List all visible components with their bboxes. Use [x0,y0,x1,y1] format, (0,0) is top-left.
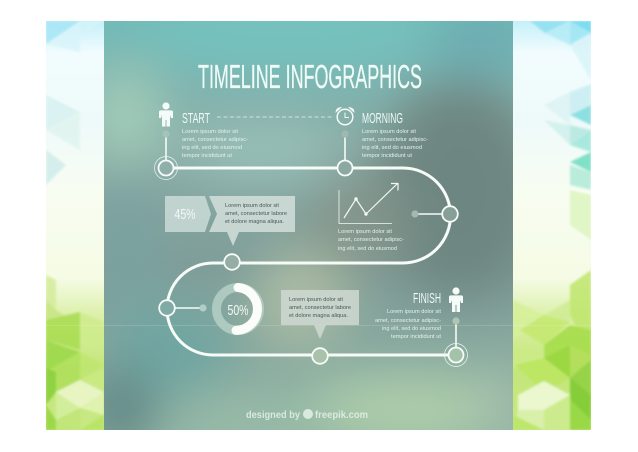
title: TIMELINE INFOGRAPHICS [198,58,422,95]
step: finish [375,287,468,366]
text: finish description [375,309,442,340]
step: morning [336,108,428,176]
text: morning description: amet, consectetur adipisc- [362,137,428,143]
heading: start: START [182,110,210,127]
text: morning description: ing elit, sed do eiusmod [362,145,422,151]
panel: blurred teal background [104,21,513,430]
icon: child figure [159,102,173,126]
node: morning [338,130,352,176]
text: callout: et dolore magna aliqua. [225,219,284,225]
credit: designed by [246,409,300,421]
line chart [339,184,398,224]
callout box [209,196,295,246]
chevron label [165,196,211,232]
text: start description: Lorem ipsum dolor sit [182,129,239,135]
panel: left mosaic band [46,21,104,430]
text: chart description [338,229,404,252]
text: chart description: amet, consectetur adipisc- [338,237,404,243]
timeline path [166,168,457,355]
text: start description [182,129,248,159]
text: start description: amet, consectetur adipisc- [182,137,248,143]
text: callout: Lorem ipsum dolor sit [225,203,280,209]
icon: child figure [449,287,463,312]
text: morning description: tempor incididunt ut [362,153,413,159]
callout: lower: et dolore magna aliqua. [289,313,348,319]
text: finish description: tempor incididunt ut [391,334,442,340]
node: finish [444,317,468,366]
text: callout [225,203,287,225]
node: right branch [411,206,458,222]
text: chart description: ing elit, sed do eiusmod [338,246,397,252]
text: finish description: ing elit, sed do eiusmod [382,326,441,332]
text: chart description: Lorem ipsum dolor sit [338,229,393,235]
callout: lower [281,290,359,339]
text: morning description [362,129,428,159]
text: morning description: Lorem ipsum dolor sit [362,129,417,135]
callout: 45 percent [165,196,295,246]
value: 45%: 45% [174,206,196,223]
heading: finish: FINISH [413,290,441,307]
callout: lower: amet, consectetur labore [289,305,351,311]
credit: freepik.com [315,409,368,421]
credit [246,409,368,421]
donut chart 50% [216,288,260,330]
text: start description: ing elit, sed do eiusmod [182,145,242,151]
donut chart 50%: 50% [228,302,248,319]
node: upper return [224,254,240,270]
callout: lower: Lorem ipsum dolor sit [289,297,344,303]
text: finish description: Lorem ipsum dolor sit [387,309,442,315]
panel: right mosaic band [513,21,591,430]
node: left branch [159,300,207,316]
heading: morning: MORNING [362,110,403,127]
node: lower [312,348,328,364]
text: finish description: amet, consectetur adipisc- [375,318,441,324]
step: start [154,102,248,180]
icon: alarm clock [336,108,354,125]
node: start [154,130,178,180]
text: callout: amet, consectetur labore [225,211,287,217]
dashed connector [217,116,334,118]
text: start description: tempor incididunt ut [182,153,233,159]
